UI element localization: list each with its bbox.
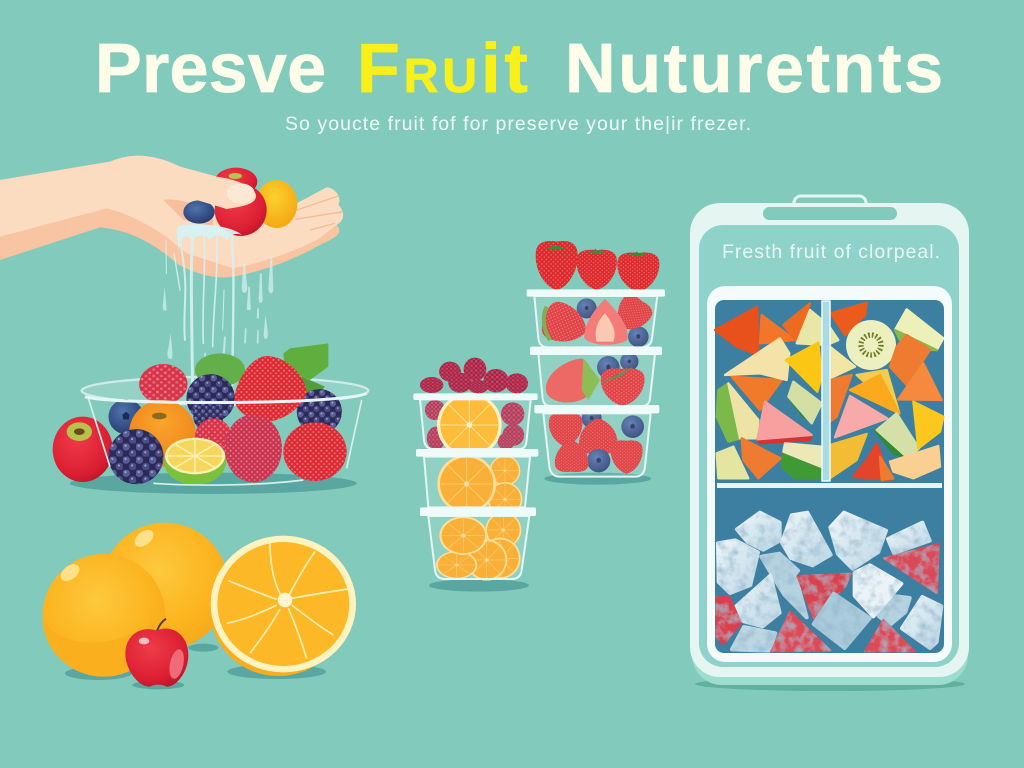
bowl shadow [70,473,357,494]
title: Presve [95,29,326,107]
panel: washing fruit [0,156,368,494]
title: Nuturetnts [565,29,943,107]
freezer shadow [695,677,965,691]
whole orange back [102,523,228,649]
panel: freezer [690,196,969,691]
berries front of bowl [108,414,347,484]
cut orange [210,536,356,676]
right stack: lids [527,289,665,413]
fruit in hand [183,168,297,236]
vertical divider [822,301,830,481]
whole orange front [43,554,165,677]
thumb [160,167,256,209]
left stack: lids [413,393,538,516]
small apple [125,619,188,687]
shelf [717,483,942,488]
freezer label: Fresth fruit of clorpeal. [722,241,940,263]
shadows [65,644,326,689]
left stack: containers [420,399,531,579]
blue compartment [715,300,944,653]
orange in bowl [129,400,196,467]
water stream [163,224,273,396]
left stack: fruit [420,358,528,581]
freezer top pill [763,207,897,220]
freezer base [692,230,968,685]
panel: oranges and apple [43,523,356,689]
bowl rim back [82,377,368,405]
title [95,29,943,107]
right stack: containers [534,296,657,477]
leaves [195,343,328,397]
white tray [707,286,952,662]
right stack: fruit [536,241,659,474]
lime half [164,438,226,485]
apple in bowl [53,417,113,482]
subtitle: So youcte fruit fof for preserve your the|ir frezer. [285,113,751,135]
title: FRUit [357,29,532,107]
hand holding fruit [0,156,343,277]
freezer inner [699,225,959,667]
shadows [429,473,651,592]
freezer frame [690,203,969,677]
fresh fruit pieces [715,303,943,480]
panel: containers [413,241,665,592]
bowl front [85,393,367,485]
freezer handle [794,196,866,214]
berries in bowl [108,356,342,434]
frozen fruit and ice [716,513,941,652]
